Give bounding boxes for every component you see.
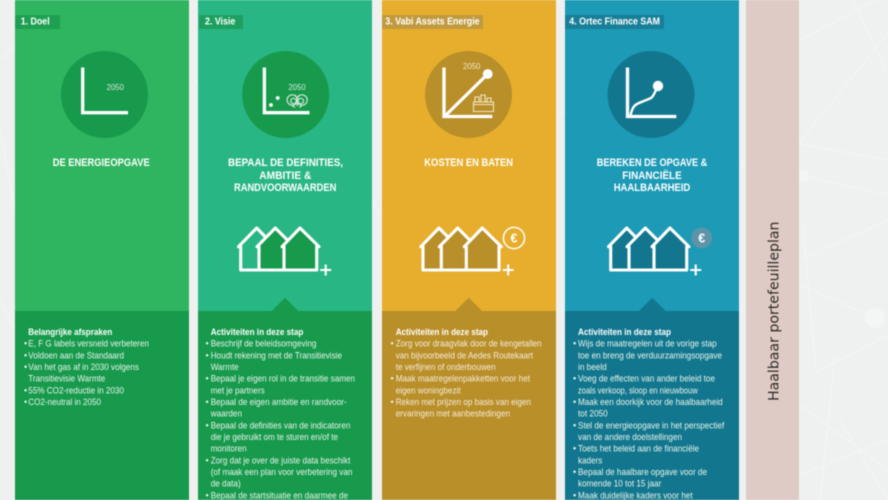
panel: 3. Vabi Assets Energie [382,0,556,500]
text block: activiteiten [206,327,355,500]
text block: activiteiten: kaders [578,455,603,465]
text block: belangrijke afspraken: • [24,397,27,407]
text block: activiteiten: te verfijnen of onderbouwen [396,362,496,372]
panel: 2. Visie [198,0,372,500]
text block: activiteiten: • [390,339,394,349]
heading: bereken de opgave: BEREKEN DE OPGAVE & [597,157,708,169]
text block: activiteiten: • [573,374,576,384]
icon: rising chart with toolbox [425,51,512,138]
icon: empty chart with 2050 [61,51,148,138]
icon: chart with curve [608,51,694,138]
text block: activiteiten: • [390,397,394,407]
text block: activiteiten: • [206,455,209,465]
text block: belangrijke afspraken: • [24,350,27,360]
text block: belangrijke afspraken: • [24,362,27,372]
icon: chart with dots and 2050: 2050 [288,83,306,92]
text block: activiteiten: • [206,397,209,407]
text block: activiteiten: Toets het beleid aan de financiële [578,444,699,454]
tag: 1. Doel: 1. Doel [21,16,50,28]
text block: belangrijke afspraken: • [24,385,27,395]
text block: belangrijke afspraken: • [24,339,27,349]
icon: three houses plus [238,228,331,276]
text block: belangrijke afspraken: Belangrijke afspraken [28,327,112,337]
text block: activiteiten: Houdt rekening met de Transitievisie [211,350,342,360]
text block: activiteiten: (of maak een plan voor verbetering van [211,467,352,477]
panel: 4. Ortec Finance SAM [565,0,739,500]
text block: activiteiten: • [206,420,209,430]
text block: activiteiten: Bepaal de startsituatie en daarmee de [211,490,348,500]
icon: three houses plus euro: € [698,232,705,246]
heading: kosten en baten: KOSTEN EN BATEN [424,157,513,169]
text block: activiteiten [390,327,542,419]
text block: activiteiten: Stel de energieopgave in het perspectief [578,420,725,430]
tag: 2. Visie: 2. Visie [205,16,236,28]
icon: chart with dots and 2050 [242,51,329,138]
text block: activiteiten: Maak duidelijke kaders voor het [578,490,693,500]
icon: empty chart with 2050: 2050 [107,83,125,92]
text block: activiteiten: in beeld [578,362,607,372]
text block: activiteiten: van de andere doelstellingen [578,432,682,442]
icon: three houses plus euro [608,228,712,276]
text block: activiteiten: • [390,374,394,384]
text block: activiteiten: tot 2050 [578,409,608,419]
text block: belangrijke afspraken: Transitievisie Warmte [28,374,105,384]
tag: 2. Visie [199,15,243,29]
text block: activiteiten: van bijvoorbeeld de Aedes Routekaart [396,350,533,360]
icon: three houses plus euro: € [511,232,518,246]
text block: activiteiten: toe en breng de verduurzamingsopgave [578,350,722,360]
text block: activiteiten: ervaringen met aanbestedingen [396,409,510,419]
text block: activiteiten: Bepaal de eigen ambitie en randvoor- [211,397,347,407]
text block: activiteiten: Maak maatregelenpakketten voor het [396,374,530,384]
text block: activiteiten: • [573,467,576,477]
text block: belangrijke afspraken: E, F G labels versneld verbeteren [28,339,149,349]
text block: activiteiten: waarden [210,409,242,419]
text block: activiteiten: Beschrijf de beleidsomgeving [211,339,316,349]
text block: activiteiten: • [573,490,576,500]
text block: activiteiten: zoals verkoop, sloop en nieuwbouw [578,385,698,395]
text block: activiteiten: • [573,339,576,349]
heading: bepaal de definities: AMBITIE & [259,170,312,182]
text block: activiteiten: Zorg dat je over de juiste data beschikt [211,455,351,465]
text block: activiteiten [573,327,725,500]
vertical label: Haalbaar portefeuilleplan [766,222,782,401]
text block: activiteiten: Warmte [211,362,239,372]
tag: 4. Ortec Finance SAM: 4. Ortec Finance SAM [569,16,660,28]
text block: activiteiten: de data) [211,479,241,489]
text block: activiteiten: Wijs de maatregelen uit de vorige stap [578,339,717,349]
text block: activiteiten: • [206,374,209,384]
heading: bepaal de definities: BEPAAL DE DEFINITIES, [228,157,343,169]
text block: activiteiten: Voeg de effecten van ander beleid toe [578,374,715,384]
text block: activiteiten: • [573,444,576,454]
text block: activiteiten: Activiteiten in deze stap [211,327,304,337]
heading: bereken de opgave: HAALBAARHEID [614,182,691,194]
heading: bepaal de definities [228,157,343,194]
text block: activiteiten: • [573,397,576,407]
text block: activiteiten: Activiteiten in deze stap [396,327,488,337]
text block: belangrijke afspraken: Voldoen aan de Standaard [28,350,124,360]
triangle pointer [272,298,298,311]
text block: activiteiten: Activiteiten in deze stap [578,327,671,337]
text block: activiteiten: eigen woningbezit [396,385,461,395]
text block: activiteiten: Maak een doorkijk voor de haalbaarheid [578,397,723,407]
heading: bereken de opgave: FINANCIËLE [622,169,682,182]
text block: activiteiten: • [206,490,209,500]
text block: belangrijke afspraken: Van het gas af in 2030 volgens [28,362,139,372]
text block: activiteiten: Reken met prijzen op basis van eigen [396,397,531,407]
text block: activiteiten: Bepaal de definities van de indicatoren [211,420,350,430]
text block: activiteiten: Bepaal de haalbare opgave voor de [578,467,707,477]
text block: activiteiten: • [573,420,576,430]
text block: activiteiten: monitoren [211,444,247,454]
text block: belangrijke afspraken: CO2-neutral in 2050 [28,397,101,407]
tag: 3. Vabi Assets Energie: 3. Vabi Assets Energie [385,16,480,28]
icon: rising chart with toolbox: 2050 [463,62,481,71]
text block: activiteiten: Zorg voor draagvlak door de kengetallen [396,339,542,349]
text block: activiteiten: Bepaal je eigen rol in de transitie samen [211,374,355,384]
text block: belangrijke afspraken: 55% CO2-reductie in 2030 [28,385,124,395]
heading: De energieopgave: DE ENERGIEOPGAVE [53,157,150,169]
heading: bepaal de definities: RANDVOORWAARDEN [234,182,336,194]
text block: activiteiten: die je gebruikt om te sturen en/of te [211,432,338,442]
text block: activiteiten: • [206,350,209,360]
text block: activiteiten: komende 10 tot 15 jaar [578,479,661,489]
panel: haalbaar portefeuilleplan [746,0,799,500]
icon: three houses plus euro [421,227,525,276]
triangle pointer [639,298,666,311]
heading: bereken de opgave [597,157,708,194]
text block: activiteiten: met je partners [211,385,265,395]
triangle pointer [455,298,482,311]
panel: 1. Doel [15,0,189,500]
tag: 1. Doel [15,15,60,29]
text block: belangrijke afspraken [24,327,149,407]
text block: activiteiten: • [206,339,209,349]
